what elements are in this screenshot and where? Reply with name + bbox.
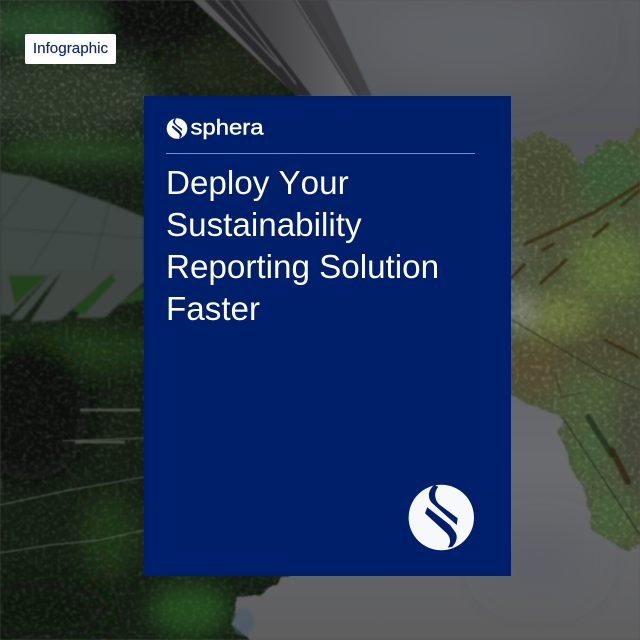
blue sky patch xyxy=(232,608,254,636)
icon: sphera mark xyxy=(408,484,474,550)
label: Infographic xyxy=(25,34,116,64)
concrete ledge xyxy=(0,172,144,322)
title: Sustainability xyxy=(166,207,362,244)
title xyxy=(166,165,439,328)
label: Infographic: Infographic xyxy=(33,40,108,57)
trunks xyxy=(512,184,640,535)
ivy patches in ledge gaps xyxy=(8,275,144,315)
title: Deploy Your xyxy=(166,165,349,202)
building facade xyxy=(193,0,372,96)
panel: report cover xyxy=(144,96,511,576)
sphera logo xyxy=(166,117,264,140)
title: Faster xyxy=(166,291,260,328)
bare branches xyxy=(0,438,144,553)
tree right xyxy=(511,128,640,552)
foliage left xyxy=(0,0,320,640)
sphera logo: sphera xyxy=(190,117,263,140)
sky tones xyxy=(360,0,580,580)
title: Reporting Solution xyxy=(166,249,439,286)
